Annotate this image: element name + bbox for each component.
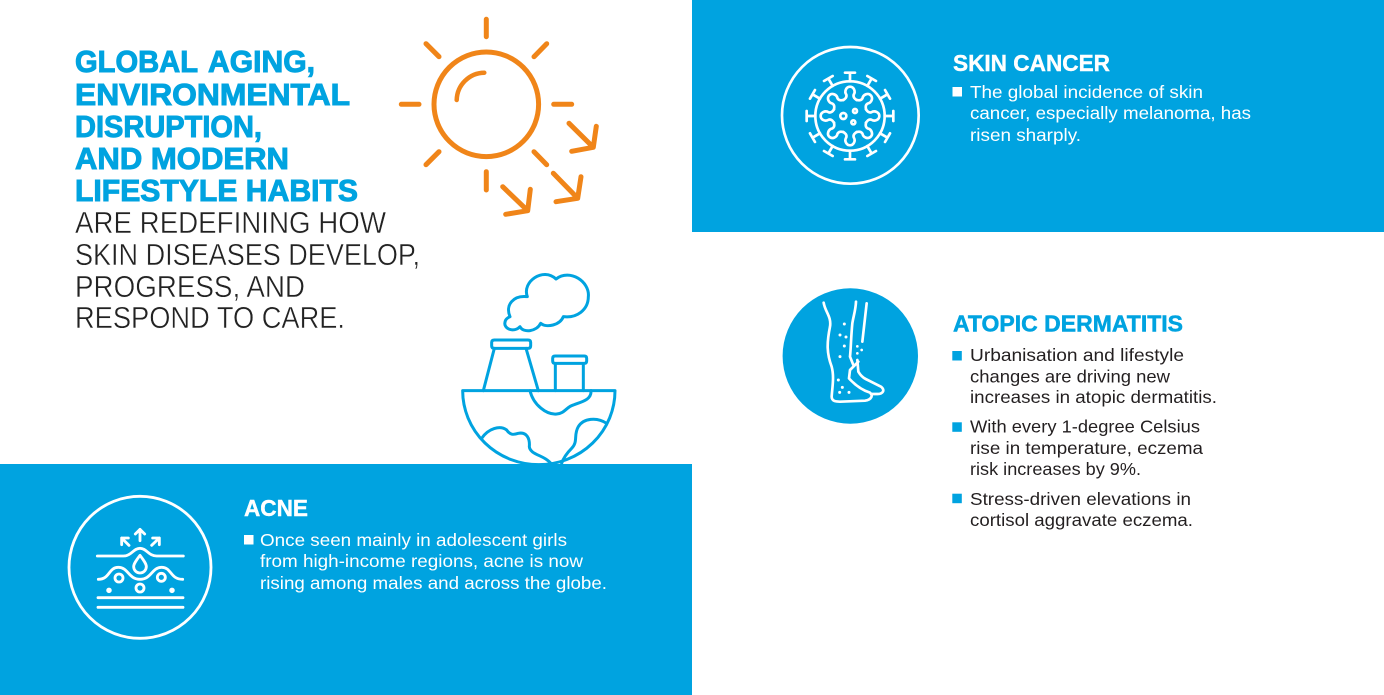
main heading	[75, 44, 420, 335]
bullet 3 text: Stress-driven elevations in	[970, 489, 1191, 509]
heading: light dark lines: SKIN DISEASES DEVELOP,	[75, 237, 420, 272]
icon: sun with arrows	[401, 19, 596, 214]
heading: bold blue lines: GLOBAL	[75, 44, 198, 79]
bullet 2 text: With every 1-degree Celsius	[970, 417, 1200, 437]
heading: bold blue lines: AND MODERN	[75, 141, 289, 176]
heading: light dark lines: ARE REDEFINING HOW	[75, 205, 387, 240]
large chimney	[483, 340, 538, 391]
bullet 1 text: increases in atopic dermatitis.	[970, 387, 1217, 407]
text: skin cancer	[952, 50, 1251, 145]
heading: light dark lines: RESPOND TO CARE.	[75, 300, 345, 335]
heading: light dark lines: PROGRESS, AND	[75, 269, 305, 304]
skin cancer body: risen sharply.	[970, 125, 1081, 145]
icon: skin layers with drop	[69, 496, 211, 638]
bullet 2 text: rise in temperature, eczema	[970, 438, 1203, 458]
globe	[463, 391, 615, 465]
bullet 1 text: Urbanisation and lifestyle	[970, 345, 1184, 365]
heading: bold blue lines: AGING,	[208, 44, 315, 79]
smoke cloud	[505, 274, 588, 331]
atopic dermatitis title: ATOPIC DERMATITIS	[953, 310, 1183, 336]
icon: virus in circle	[782, 47, 919, 184]
bullet 3 text	[970, 489, 1193, 530]
acne body: rising among males and across the globe.	[260, 573, 607, 593]
heading: bold blue lines: ENVIRONMENTAL	[75, 77, 350, 112]
bullet 2 text: risk increases by 9%.	[970, 459, 1141, 479]
bullet	[244, 535, 254, 544]
heading: bold blue lines: LIFESTYLE HABITS	[75, 173, 358, 208]
heading: bold blue lines	[75, 44, 358, 208]
globe continents	[482, 391, 607, 464]
bullet 3	[952, 494, 962, 503]
acne body: Once seen mainly in adolescent girls	[260, 530, 567, 550]
virus body	[807, 73, 893, 159]
skin cancer body: The global incidence of skin	[970, 82, 1203, 102]
heading: bold blue lines: DISRUPTION,	[75, 109, 262, 144]
bullet 1 text	[970, 345, 1217, 407]
acne body: from high-income regions, acne is now	[260, 551, 583, 571]
panel: skin cancer background	[692, 0, 1384, 232]
bullet 3 text: cortisol aggravate eczema.	[970, 510, 1193, 530]
skin cancer title: SKIN CANCER	[953, 50, 1110, 76]
bullet 1 text: changes are driving new	[970, 366, 1170, 386]
bullet	[952, 87, 962, 96]
acne title: ACNE	[244, 495, 308, 521]
acne body	[260, 530, 607, 593]
text: acne	[244, 495, 607, 593]
icon: factory on globe	[463, 274, 615, 465]
panel: acne background	[0, 464, 692, 695]
skin cancer body: cancer, especially melanoma, has	[970, 103, 1251, 123]
small chimney	[553, 356, 587, 391]
bullet 2 text	[970, 417, 1203, 479]
skin cancer body	[970, 82, 1251, 145]
bullet 1	[952, 351, 962, 360]
text: atopic dermatitis	[952, 310, 1217, 530]
icon: leg with rash	[783, 288, 918, 424]
heading: light dark lines	[75, 205, 420, 335]
bullet 2	[952, 422, 962, 432]
